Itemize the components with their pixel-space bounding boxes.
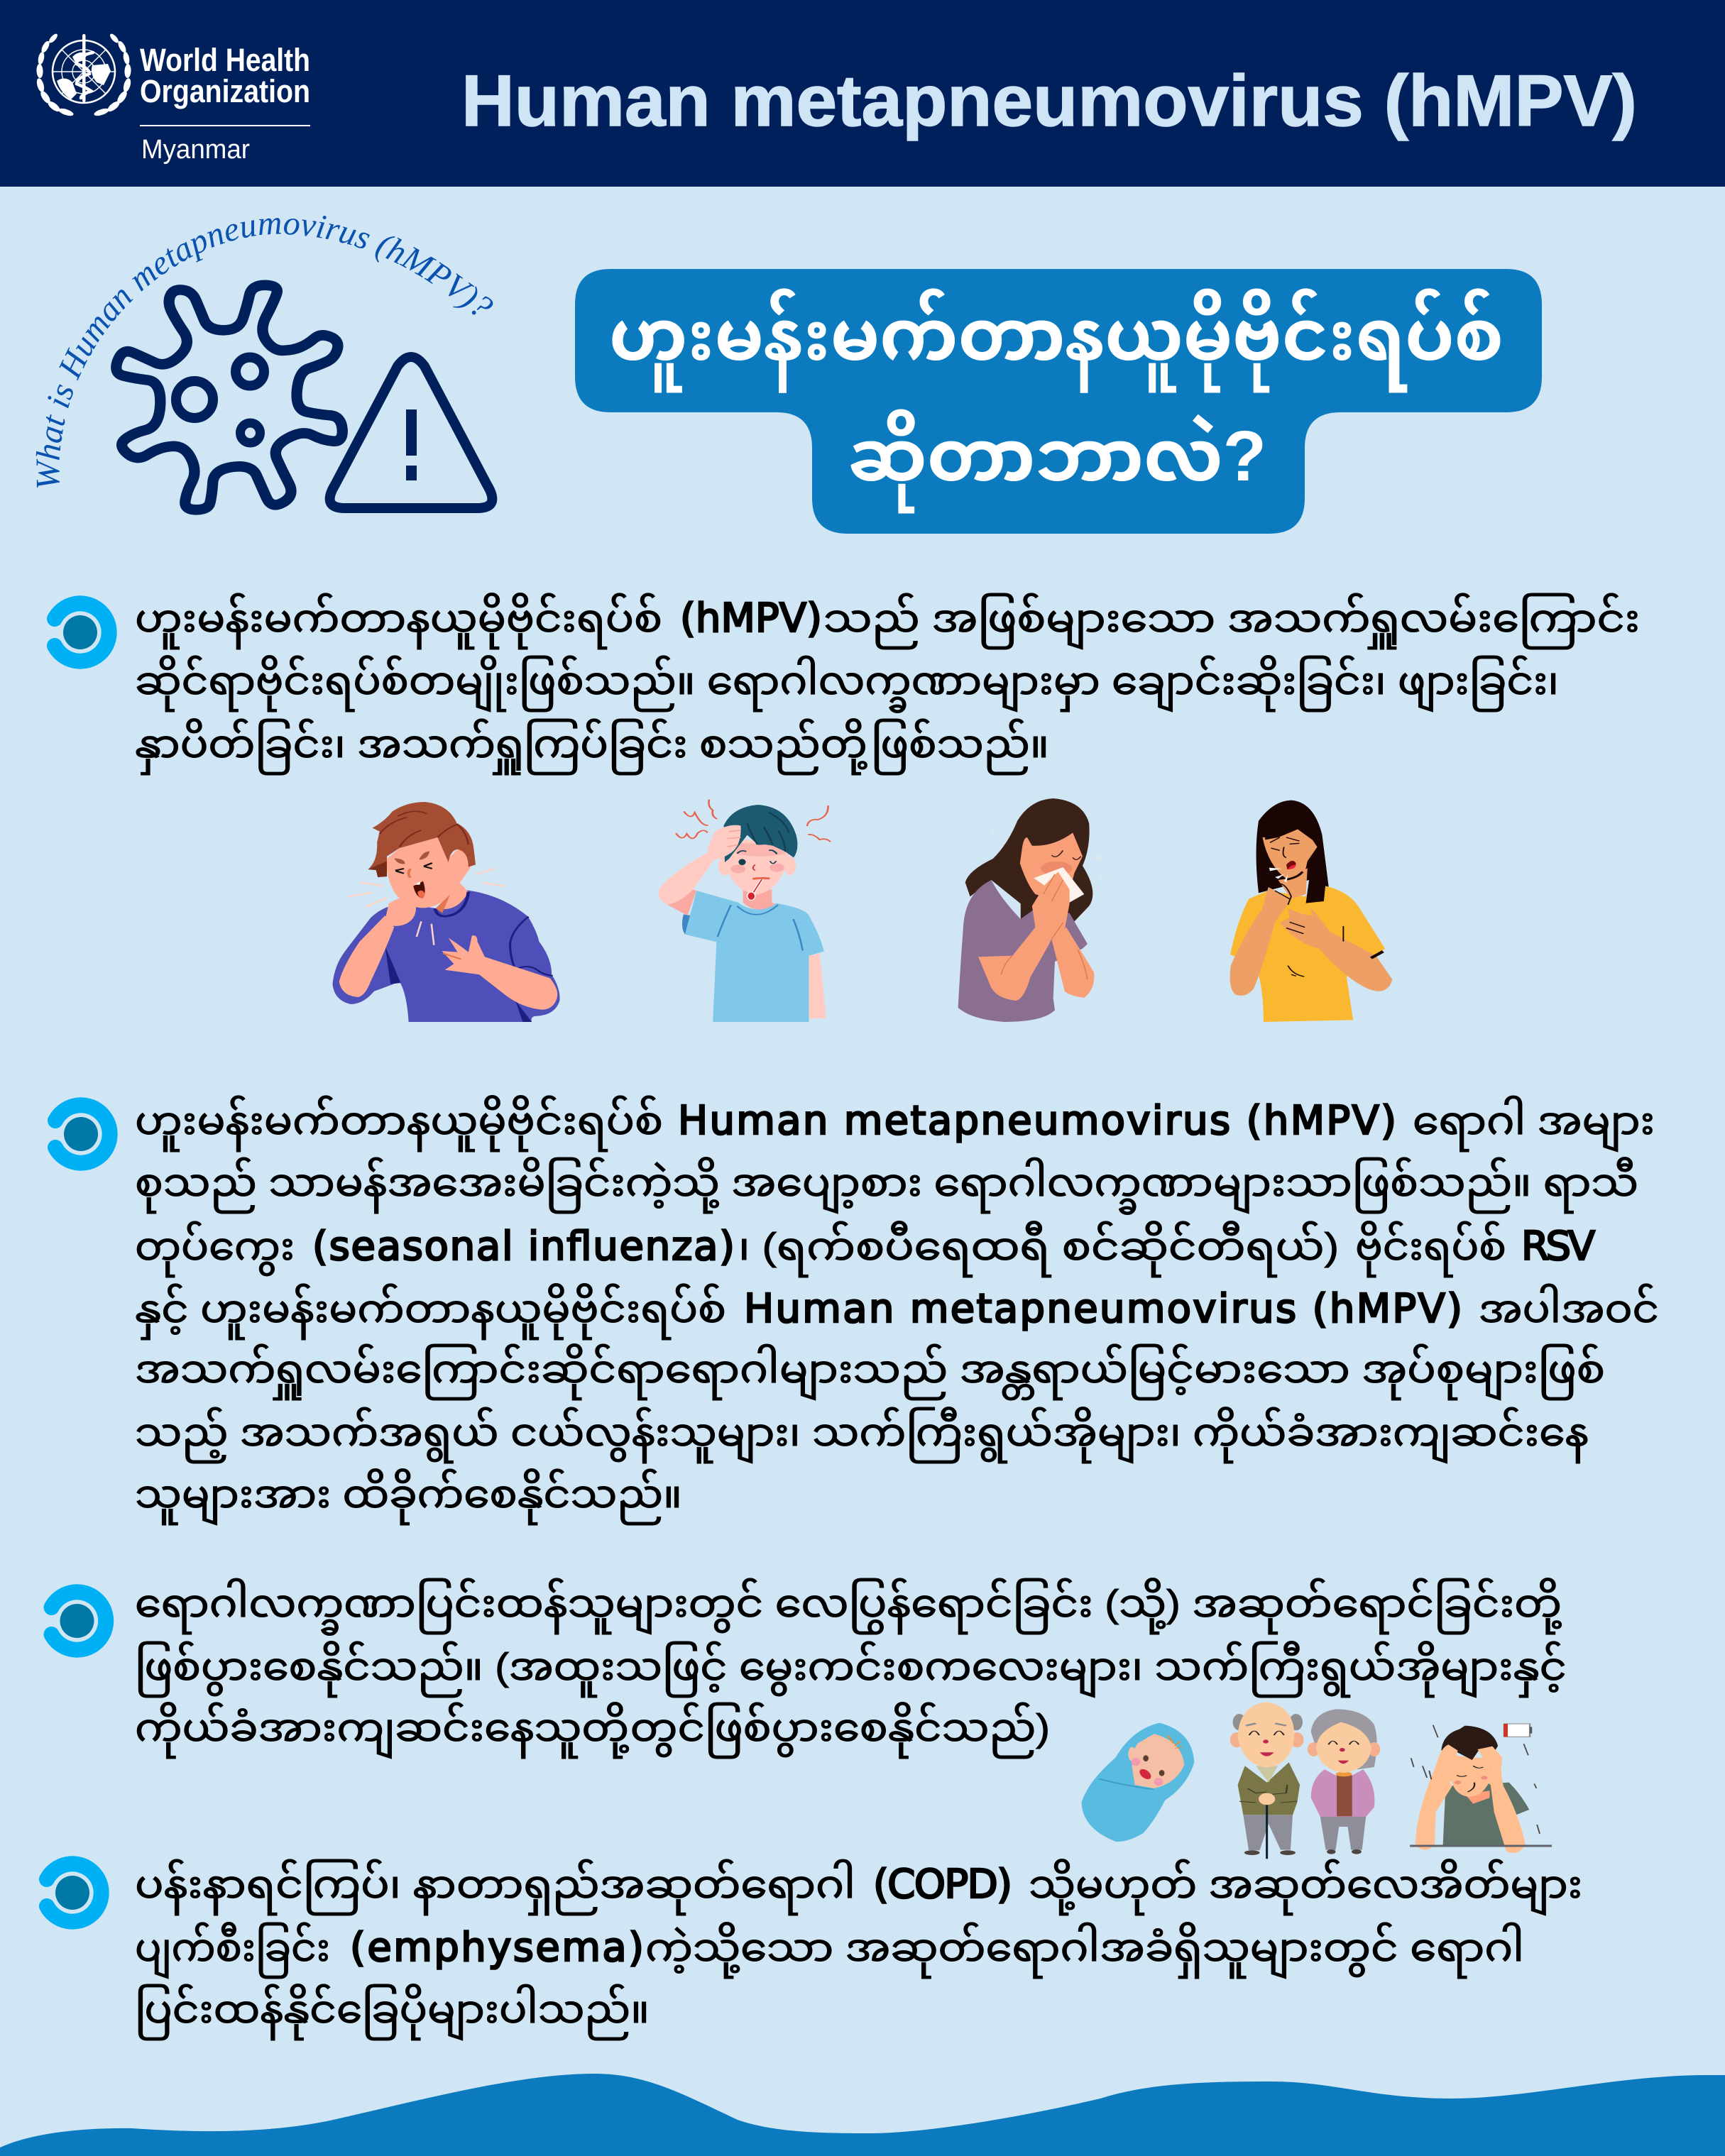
paragraph 2: အသက်ရှူလမ်းကြောင်းဆိုင်ရာရောဂါများသည် အန္တရာယ်မြင့်မားသော အုပ်စုများဖြစ် (135, 1343, 1605, 1402)
icon: WHO emblem (35, 33, 132, 117)
paragraph 2: ရောဂါ အများ (1413, 1095, 1655, 1153)
paragraph 1 (135, 593, 1640, 776)
paragraph 2: ဗိုင်းရပ်စ် (1355, 1221, 1506, 1278)
paragraph 1: ဟူးမန်းမက်တာနယူမိုဗိုင်းရပ်စ် (135, 593, 662, 650)
paragraph 2: နှင့် ဟူးမန်းမက်တာနယူမိုဗိုင်းရပ်စ် (135, 1283, 726, 1341)
paragraph 2: တုပ်ကွေး (135, 1221, 295, 1278)
bullet 1 (55, 603, 109, 661)
paragraph 4: ကဲ့သို့သော အဆုတ်ရောဂါအခံရှိသူများတွင် ရောဂါ (645, 1922, 1524, 1980)
WHO wordmark: World Health (140, 42, 310, 78)
heading text: ဟူးမန်းမက်တာနယူမိုဗိုင်းရပ်စ် (609, 287, 1504, 393)
paragraph 4 (135, 1859, 1582, 2042)
paragraph 2: Human metapneumovirus (hMPV) (678, 1098, 1396, 1144)
paragraph 4: ပြင်းထန်နိုင်ခြေပိုများပါသည်။ (135, 1984, 650, 2042)
header band (0, 0, 1725, 187)
paragraph 3: ရောဂါလက္ခဏာပြင်းထန်သူများတွင် လေပြွန်ရောင်ခြင်း (သို့) အဆုတ်ရောင်ခြင်းတို့ (135, 1578, 1562, 1636)
heading text: ဆိုတာဘာလဲ? (848, 408, 1266, 514)
paragraph 2 (135, 1095, 1659, 1527)
paragraph 2: သည့် အသက်အရွယ် ငယ်လွန်းသူများ၊ သက်ကြီးရွယ်အိုများ၊ ကိုယ်ခံအားကျဆင်းနေ (135, 1407, 1589, 1465)
paragraph 2: ၊ (ရက်စပီရေထရီ စင်ဆိုင်တီရယ်) (738, 1221, 1339, 1278)
WHO wordmark: Myanmar (141, 135, 250, 165)
bullet 2 (55, 1105, 110, 1163)
heading panel (575, 269, 1542, 534)
illustration: boy with fever (659, 800, 831, 1022)
paragraph 2: RSV (1521, 1223, 1595, 1270)
icon: warning triangle (330, 357, 492, 508)
illustration: elderly couple (1230, 1702, 1380, 1859)
paragraph 3: ကိုယ်ခံအားကျဆင်းနေသူတို့တွင်ဖြစ်ပွားစေနိုင်သည်) (135, 1702, 1050, 1760)
icon: virus (116, 285, 342, 510)
paragraph 2: သူများအား ထိခိုက်စေနိုင်သည်။ (135, 1468, 682, 1527)
paragraph 4: ပန်းနာရင်ကြပ်၊ နာတာရှည်အဆုတ်ရောဂါ (135, 1859, 855, 1916)
paragraph 4: (emphysema) (350, 1925, 644, 1971)
paragraph 2: ဟူးမန်းမက်တာနယူမိုဗိုင်းရပ်စ် (135, 1095, 663, 1153)
paragraph 1: သည် အဖြစ်များသော အသက်ရှူလမ်းကြောင်း (823, 593, 1640, 651)
footer wave (0, 2074, 1725, 2156)
paragraph 1: နှာပိတ်ခြင်း၊ အသက်ရှူကြပ်ခြင်း စသည်တို့ဖြစ်သည်။ (135, 718, 1049, 776)
paragraph 2: အပါအဝင် (1479, 1283, 1659, 1331)
illustration: man coughing (332, 802, 560, 1022)
paragraph 1: ဆိုင်ရာဗိုင်းရပ်စ်တမျိုးဖြစ်သည်။ ရောဂါလက္ခဏာများမှာ ချောင်းဆိုးခြင်း၊ ဖျားခြင်း၊ (135, 655, 1559, 713)
curved caption: What is Human metapneumovirus (hMPV)? (35, 216, 493, 488)
paragraph 3 (135, 1578, 1567, 1760)
illustration: woman sneezing into tissue (958, 798, 1105, 1022)
WHO wordmark: Organization (140, 73, 310, 109)
paragraph 2: စုသည် သာမန်အအေးမိခြင်းကဲ့သို့ အပျော့စား ရောဂါလက္ခဏာများသာဖြစ်သည်။ ရာသီ (135, 1157, 1638, 1215)
illustration: woman coughing (1230, 801, 1392, 1022)
paragraph 3: ဖြစ်ပွားစေနိုင်သည်။ (အထူးသဖြင့် မွေးကင်းစကလေးများ၊ သက်ကြီးရွယ်အိုများနှင့် (135, 1641, 1567, 1699)
paragraph 1: (hMPV) (680, 595, 822, 642)
title: Human metapneumovirus (hMPV) (461, 60, 1637, 141)
bullet 3 (51, 1592, 106, 1650)
illustration: swaddled baby (1081, 1723, 1194, 1842)
paragraph 2: (seasonal influenza) (312, 1223, 735, 1270)
paragraph 4: သို့မဟုတ် အဆုတ်လေအိတ်များ (1029, 1859, 1582, 1917)
heading text (609, 287, 1504, 514)
WHO wordmark (140, 42, 310, 165)
paragraph 4: ပျက်စီးခြင်း (135, 1922, 330, 1980)
paragraph 4: (COPD) (873, 1861, 1012, 1908)
paragraph 2: Human metapneumovirus (hMPV) (744, 1286, 1462, 1332)
illustration: exhausted man (1410, 1724, 1552, 1853)
bullet 4 (47, 1864, 102, 1922)
